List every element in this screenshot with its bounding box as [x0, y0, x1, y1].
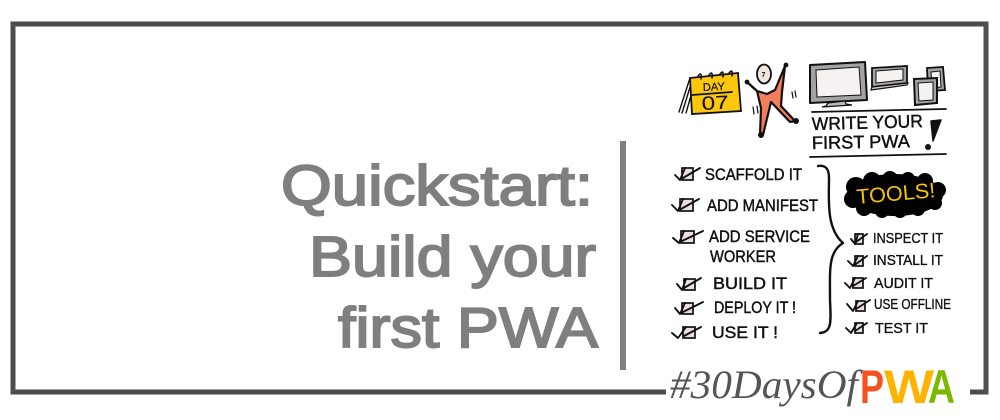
check item: test it: TEST IT [875, 321, 928, 337]
title: Quickstart: [281, 154, 593, 218]
vertical divider [620, 141, 626, 370]
checklist: build steps [672, 166, 818, 342]
hashtag logo: P [860, 360, 884, 413]
icon: laptop [871, 66, 908, 90]
icon: jumping figure [745, 63, 799, 138]
check item: install it: INSTALL IT [873, 253, 943, 269]
check item: audit it: AUDIT IT [874, 276, 933, 292]
title: Build your [309, 225, 596, 289]
hashtag logo: W [884, 360, 935, 413]
title: first PWA [338, 296, 598, 360]
check item: build it [677, 275, 787, 293]
check item: deploy it: DEPLOY IT ! [714, 299, 796, 317]
check item: use offline: USE OFFLINE [874, 297, 951, 313]
icon: phone and tablet [914, 67, 945, 105]
hashtag logo: A [928, 360, 955, 413]
heading: write your first PWA: WRITE YOUR [812, 111, 923, 134]
icon: calendar: 07 [701, 93, 729, 115]
heading: write your first PWA: FIRST PWA [812, 131, 910, 153]
callout: tools cloud: TOOLS! [855, 179, 936, 209]
check item: use it: USE IT ! [712, 324, 778, 342]
hashtag logo: #30DaysOf [670, 362, 863, 407]
icon: jumping figure: 7 [762, 72, 766, 79]
hashtag logo [670, 360, 955, 413]
icon: calendar [679, 71, 741, 115]
check item: use it [672, 324, 778, 342]
callout: tools cloud [844, 171, 946, 218]
check item: add manifest: ADD MANIFEST [707, 197, 818, 215]
check item: add service worker [673, 228, 810, 266]
heading: write your first PWA [812, 111, 941, 153]
check item: inspect it: INSPECT IT [873, 231, 943, 247]
illustration panel [657, 50, 960, 352]
icon: calendar: DAY [703, 81, 726, 94]
icon: monitor [810, 62, 867, 107]
check item: scaffold it: SCAFFOLD IT [705, 166, 802, 184]
checklist: tools [845, 231, 951, 337]
check item: add service worker: WORKER [710, 248, 776, 266]
check item: build it: BUILD IT [713, 275, 787, 293]
curly brace [818, 166, 843, 333]
check item: deploy it [675, 299, 796, 317]
title [281, 154, 598, 360]
check item: add service worker: ADD SERVICE [709, 228, 810, 246]
